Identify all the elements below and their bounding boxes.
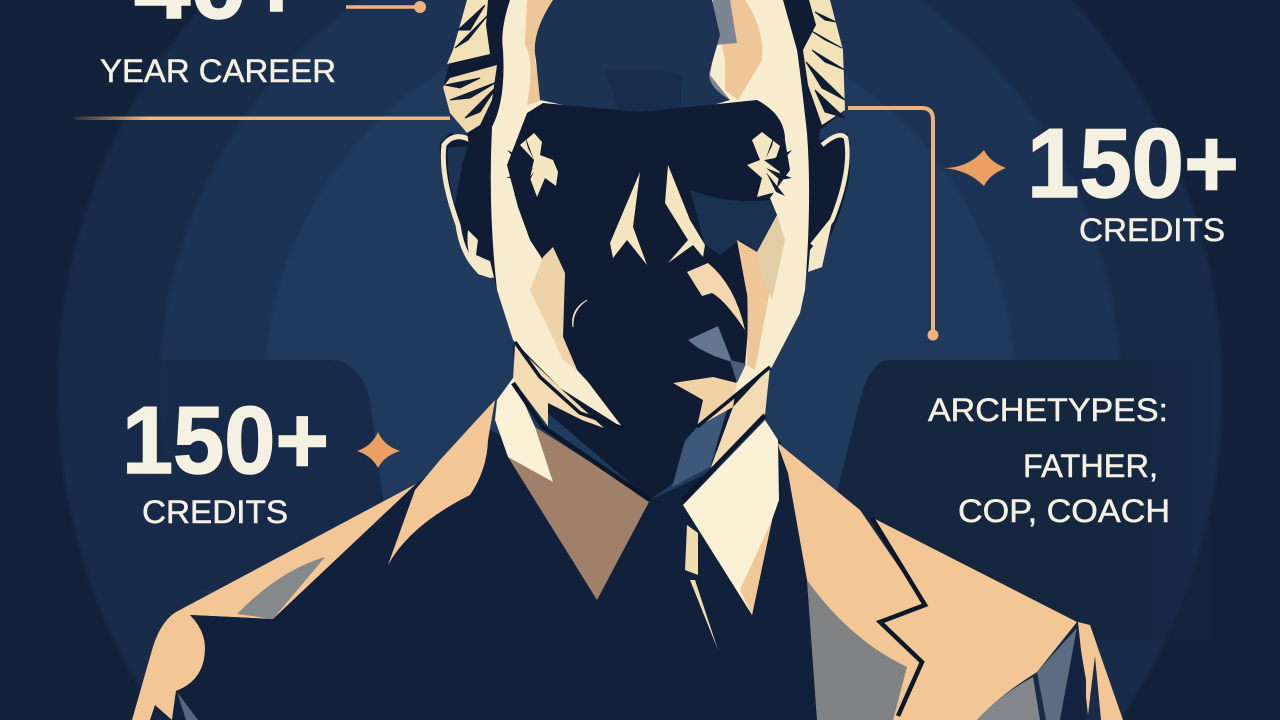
statistic: 40+ year career: YEAR CAREER bbox=[100, 53, 336, 89]
text: archetypes: FATHER, bbox=[1023, 448, 1158, 484]
lower cheek shade bbox=[690, 190, 777, 255]
right lapel bbox=[778, 443, 925, 720]
collar lines bbox=[513, 383, 765, 500]
tie highlights bbox=[685, 525, 718, 650]
panel: archetypes right bbox=[800, 360, 1210, 640]
mouth light bbox=[688, 326, 732, 362]
jaw line bbox=[515, 342, 770, 428]
neck cream left bbox=[513, 345, 604, 428]
ear right rim bbox=[812, 135, 847, 245]
brow shadow bbox=[605, 70, 682, 115]
face bbox=[491, 0, 809, 428]
lapel outline bbox=[872, 518, 925, 716]
cheek crescent left bbox=[573, 300, 587, 327]
nose right highlight bbox=[665, 165, 705, 263]
lip shade bbox=[730, 360, 746, 383]
right collar bbox=[683, 420, 779, 615]
peach shade left bbox=[525, 0, 553, 105]
connector: top stub bbox=[346, 1, 426, 13]
hair left strands bbox=[445, 5, 498, 118]
face shadow bbox=[507, 100, 790, 470]
right lapel shade bbox=[807, 580, 907, 720]
statistic: 150+ credits right: 150+ bbox=[1027, 108, 1239, 218]
right sleeve edge bbox=[1078, 622, 1123, 720]
left collar bbox=[495, 378, 553, 482]
cheek peach right bbox=[737, 240, 770, 370]
hair left bbox=[447, 0, 490, 64]
statistic: 150+ credits left: 150+ bbox=[122, 387, 329, 494]
cheek peach left bbox=[530, 247, 577, 370]
left shoulder shade bbox=[237, 557, 325, 619]
right sleeve folds bbox=[977, 677, 1040, 720]
peach shade right bbox=[713, 0, 762, 100]
hair right strands bbox=[806, 12, 845, 118]
text: archetypes: ARCHETYPES: bbox=[928, 392, 1168, 428]
eye right lashes bbox=[766, 132, 792, 196]
statistic: 150+ credits right: CREDITS bbox=[1079, 212, 1225, 248]
icon: spark left bbox=[357, 432, 400, 468]
panel: credits left bbox=[100, 360, 395, 590]
hair left lower bbox=[443, 65, 497, 133]
statistic: 150+ credits left: CREDITS bbox=[142, 494, 288, 530]
ear left lobe bbox=[467, 230, 494, 278]
sleeve spike left bbox=[150, 705, 172, 720]
hair silhouette left bbox=[443, 0, 510, 290]
ear right bbox=[800, 133, 850, 272]
cheek tan right bbox=[757, 215, 785, 300]
suit body bbox=[172, 430, 820, 720]
connector: left divider bbox=[75, 116, 450, 120]
figure: man in suit bbox=[132, 0, 1123, 720]
hair right bbox=[803, 0, 845, 125]
neck cream right bbox=[710, 367, 770, 470]
ear right lobe bbox=[808, 222, 832, 272]
ear left bbox=[440, 133, 498, 280]
text: archetypes bbox=[928, 392, 1170, 529]
ear left rim bbox=[443, 137, 492, 276]
sleeve slate left bbox=[177, 692, 198, 720]
neck shadow bbox=[513, 345, 770, 500]
left lapel bbox=[388, 400, 495, 565]
cheek band right bbox=[687, 263, 745, 330]
right jacket front bbox=[760, 440, 817, 720]
forehead bbox=[535, 0, 730, 115]
grey forehead edge bbox=[700, 0, 737, 100]
eye left lashes bbox=[506, 133, 534, 196]
neck slate bbox=[672, 410, 727, 487]
nose left highlight bbox=[610, 172, 647, 265]
left collar tan bbox=[508, 427, 650, 600]
left shoulder bbox=[132, 484, 416, 720]
icon: spark right bbox=[944, 150, 1006, 186]
ear left inner bbox=[448, 146, 468, 205]
eye left bbox=[520, 133, 558, 197]
lower lip bbox=[673, 377, 737, 427]
eye right bbox=[747, 132, 780, 197]
statistic: 40+ year career bbox=[100, 0, 336, 89]
right collar shade bbox=[740, 520, 772, 615]
right shoulder bbox=[873, 518, 1077, 720]
hair silhouette right bbox=[783, 0, 845, 270]
text: archetypes: COP, COACH bbox=[958, 493, 1170, 529]
connector: right bracket bbox=[848, 108, 938, 340]
